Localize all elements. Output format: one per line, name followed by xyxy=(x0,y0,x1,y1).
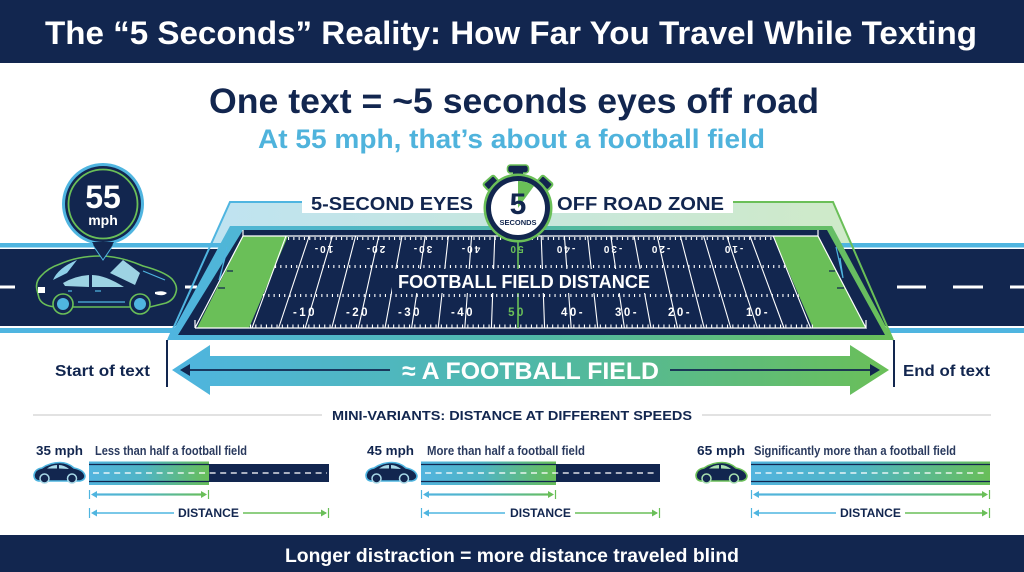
lower yard numbers: -30 xyxy=(398,307,422,319)
distance arrows xyxy=(90,490,328,520)
variant: 35 mph: 35 mph xyxy=(36,443,83,458)
subheading: At 55 mph, that’s about a football field xyxy=(258,124,765,154)
title: The “5 Seconds” Reality: How Far You Travel While Texting xyxy=(45,15,977,51)
distance arrows xyxy=(752,490,990,520)
lower yard numbers: -10 xyxy=(293,307,317,319)
icon: stopwatch: 5 xyxy=(510,188,526,221)
lower yard numbers: -20 xyxy=(346,307,370,319)
start label: Start of text xyxy=(55,363,150,380)
upper yard numbers: -30 xyxy=(602,243,622,254)
distance arrows: DISTANCE xyxy=(178,508,239,520)
variant: 65 mph: Significantly more than a football field xyxy=(754,443,956,458)
variant: 45 mph xyxy=(366,443,660,520)
upper yard numbers: 20- xyxy=(365,243,385,254)
variant: 45 mph: More than half a football field xyxy=(427,443,585,458)
speed pin xyxy=(62,163,144,260)
hash marks xyxy=(250,238,813,326)
end label: End of text xyxy=(903,363,990,380)
distance arrows: DISTANCE xyxy=(840,508,901,520)
upper yard numbers: 30- xyxy=(412,243,432,254)
car xyxy=(36,256,176,314)
variant: 65 mph: 65 mph xyxy=(697,443,745,458)
icon: car xyxy=(696,462,747,483)
goal posts xyxy=(219,247,843,280)
field label: FOOTBALL FIELD DISTANCE xyxy=(398,272,650,292)
lower yard numbers: -40 xyxy=(451,307,475,319)
lower yard numbers: 40- xyxy=(561,307,585,319)
end marker xyxy=(894,340,990,387)
start marker xyxy=(55,340,167,387)
road xyxy=(0,243,1024,333)
upper yard numbers: 10- xyxy=(313,243,333,254)
icon: stopwatch: SECONDS xyxy=(499,218,537,227)
mini section heading: MINI-VARIANTS: DISTANCE AT DIFFERENT SPEEDS xyxy=(332,408,692,423)
lower yard numbers: 20- xyxy=(668,307,692,319)
lower yard numbers: 10- xyxy=(746,307,770,319)
speed pin: mph xyxy=(88,212,118,228)
icon: stopwatch xyxy=(483,165,553,242)
end zones xyxy=(197,236,866,328)
upper yard numbers: -10 xyxy=(723,243,743,254)
variant: 35 mph xyxy=(34,443,329,520)
yard lines xyxy=(252,236,811,328)
header bar xyxy=(0,0,1024,63)
footer bar xyxy=(0,535,1024,572)
zone label left: 5-SECOND EYES xyxy=(311,194,473,214)
distance arrow: ≈ A FOOTBALL FIELD xyxy=(402,358,659,385)
lower yard numbers xyxy=(293,307,770,319)
upper yard numbers xyxy=(313,243,743,254)
icon: car xyxy=(366,462,417,483)
upper yard numbers: 50 xyxy=(508,243,524,254)
lower yard numbers: 30- xyxy=(615,307,639,319)
footer text: Longer distraction = more distance traveled blind xyxy=(285,545,739,567)
lower yard numbers: 50 xyxy=(508,307,526,319)
speed pin: 55 xyxy=(85,179,121,215)
upper yard numbers: -40 xyxy=(555,243,575,254)
upper yard numbers: 40- xyxy=(460,243,480,254)
zone label right: OFF ROAD ZONE xyxy=(557,194,724,214)
road bar xyxy=(421,462,660,485)
road bar xyxy=(89,462,329,485)
distance arrows xyxy=(422,490,660,520)
distance arrow xyxy=(172,345,889,395)
variant: 65 mph xyxy=(696,443,990,520)
road bar xyxy=(751,462,990,485)
icon: car xyxy=(34,462,85,483)
zone bracket xyxy=(168,195,893,340)
football field xyxy=(168,226,893,340)
upper yard numbers: -20 xyxy=(650,243,670,254)
distance arrows: DISTANCE xyxy=(510,508,571,520)
variant: 35 mph: Less than half a football field xyxy=(95,443,247,458)
headline: One text = ~5 seconds eyes off road xyxy=(209,82,819,121)
variant: 45 mph: 45 mph xyxy=(367,443,414,458)
